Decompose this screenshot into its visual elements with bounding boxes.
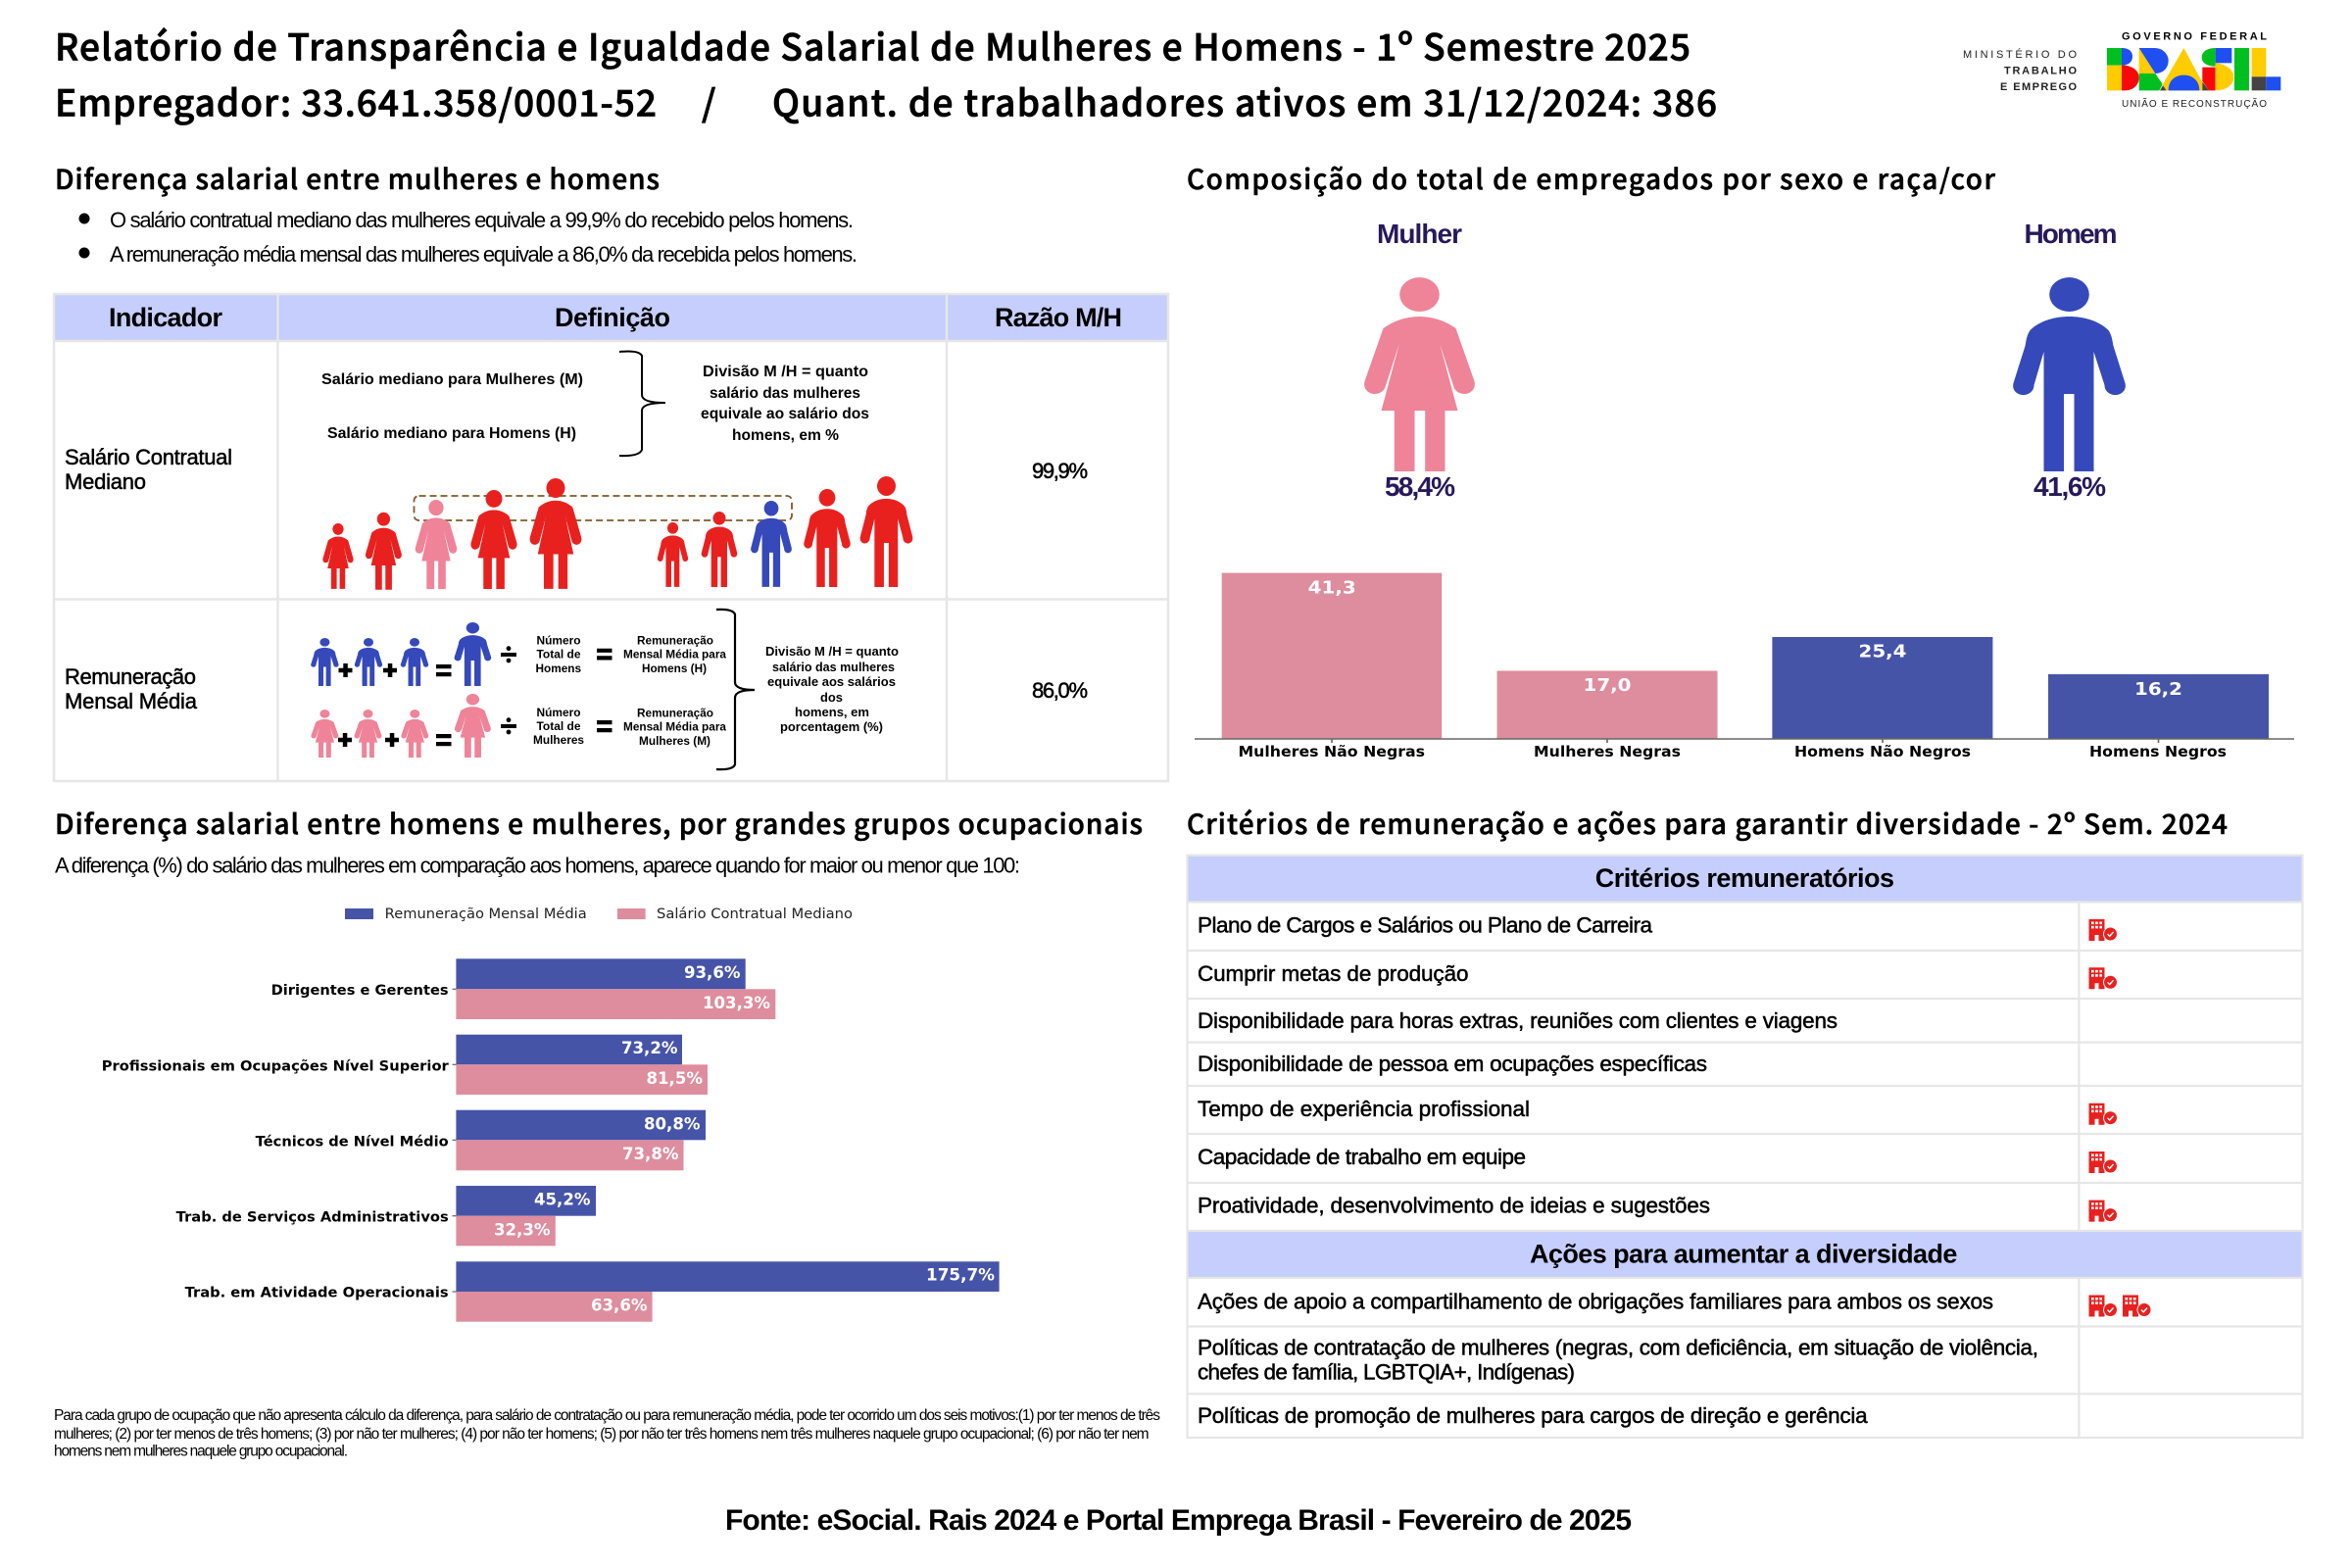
brace and formula explanation: Divisão M /H = quanto: [765, 644, 899, 659]
title line 2: /: [702, 74, 715, 127]
row: metas de produção: [1198, 961, 2118, 990]
formula: mulheres: Mensal Média para: [623, 722, 727, 734]
woman figure: 58,4%: [1385, 471, 1455, 502]
man figure: Homem: [2025, 219, 2117, 249]
value: 86,0%: 86,0%: [1032, 678, 1088, 703]
formula: homens: Homens: [535, 663, 581, 675]
row: políticas de contratação: Políticas de contratação de mulheres (negras, com deficiência, em situação de violência,: [1198, 1336, 2038, 1360]
subtitle: A diferença (%) do salário das mulheres em comparação aos homens, aparece quando for maior ou menor que 100:: [55, 854, 1020, 878]
table header: Razão M/H: [995, 303, 1122, 332]
footnote: mulheres; (2) por ter menos de três homens; (3) por não ter mulheres; (4) por não ter homens; (5) por não ter três homens nem três mulheres naquele grupo ocupacional; (6) por não ter nem: [54, 1426, 1150, 1443]
legend: Salário Contratual Mediano: [657, 906, 853, 922]
group: serviços administrativos: Trab. de Serviços Administrativos: [176, 1210, 449, 1226]
row: experiência: Tempo de experiência profissional: [1198, 1097, 1530, 1121]
heading: Diferença salarial entre homens e mulheres, por grandes grupos ocupacionais: [55, 804, 1143, 843]
source note: Fonte: eSocial. Rais 2024 e Portal Emprega Brasil - Fevereiro de 2025: [725, 1504, 1632, 1537]
row: metas de produção: Cumprir metas de produção: [1198, 961, 1468, 986]
group: atividade operacionais: 63,6%: [591, 1297, 647, 1316]
heading: Composição do total de empregados por sexo e raça/cor: [1187, 159, 1996, 198]
ministry name: [1963, 48, 2077, 93]
bullet 1: O salário contratual mediano das mulheres equivale a 99,9% do recebido pelos homens.: [110, 208, 854, 232]
formula: mulheres: Mulheres (M): [639, 736, 710, 748]
definition: salário mediano: Salário mediano para Mulheres (M): [321, 371, 583, 388]
ministry name: TRABALHO: [2004, 65, 2077, 76]
row: políticas de promoção: Políticas de promoção de mulheres para cargos de direção e gerência: [1198, 1403, 1868, 1428]
formula: homens: [311, 622, 727, 686]
group: técnicos de nível médio: Técnicos de Nível Médio: [256, 1134, 449, 1150]
bar: mulheres negras: 17,0: [1584, 675, 1631, 696]
formula: mulheres: [311, 694, 727, 758]
bar chart: raça/cor: [1195, 573, 2294, 760]
title line 2: Quant. de trabalhadores ativos em 31/12/2024: 386: [772, 74, 1717, 127]
header: ações: [1188, 1231, 2303, 1278]
footnote: [54, 1407, 1160, 1460]
man figure: [2013, 219, 2126, 502]
title line 2: Empregador: 33.641.358/0001-52: [55, 74, 657, 127]
formula: mulheres: Total de: [537, 721, 580, 733]
bar: homens negros: 16,2: [2134, 679, 2182, 700]
formula: homens: Homens (H): [642, 663, 707, 675]
row label: salário contratual mediano: Salário Contratual: [65, 445, 232, 469]
row: proatividade: [1198, 1194, 2118, 1222]
title line 1: Relatório de Transparência e Igualdade Salarial de Mulheres e Homens - 1º Semestre 2025: [55, 18, 1690, 71]
brace and formula explanation: homens, em: [795, 705, 869, 719]
row: horas extras: Disponibilidade para horas extras, reuniões com clientes e viagens: [1198, 1008, 1838, 1033]
group: profissionais nível superior: [102, 1035, 708, 1095]
group: dirigentes e gerentes: 93,6%: [684, 963, 741, 983]
logo: ministério and governo federal: [1963, 31, 2280, 110]
group: profissionais nível superior: 73,2%: [621, 1039, 678, 1058]
group: técnicos de nível médio: [256, 1110, 706, 1170]
pictogram: median line of women and men: [322, 476, 912, 590]
brasil logo shapes: [2107, 48, 2280, 90]
definition: salário mediano: homens, em %: [732, 427, 839, 444]
row label: salário contratual mediano: Mediano: [65, 469, 146, 494]
horizontal bar chart: [102, 958, 1000, 1322]
header: ações: Ações para aumentar a diversidade: [1530, 1239, 1957, 1268]
row: ocupações específicas: Disponibilidade de pessoa em ocupações específicas: [1198, 1052, 1707, 1076]
axis labels: Homens Não Negros: [1794, 743, 1971, 760]
bar: homens não negros: [1772, 637, 1992, 739]
man figure: 41,6%: [2034, 471, 2106, 502]
table: critérios: [1188, 856, 2303, 1438]
row: políticas de contratação: [1198, 1336, 2038, 1385]
axis labels: Mulheres Não Negras: [1239, 743, 1425, 760]
axis labels: [1239, 743, 2227, 760]
axis labels: Mulheres Negras: [1534, 743, 1681, 760]
footnote: Para cada grupo de ocupação que não apresenta cálculo da diferença, para salário de contratação ou para remuneração média, pode ter ocorrido um dos seis motivos:(1) por ter menos de três: [54, 1407, 1160, 1424]
row: plano de cargos: Plano de Cargos e Salários ou Plano de Carreira: [1198, 913, 1652, 938]
formula: mulheres: Mulheres: [533, 735, 584, 747]
formula: homens: Remuneração: [637, 636, 713, 648]
legend: Remuneração Mensal Média: [385, 906, 587, 922]
header: critérios remuneratórios: [1188, 856, 2303, 902]
group: atividade operacionais: 175,7%: [926, 1266, 995, 1286]
header: critérios remuneratórios: Critérios remuneratórios: [1595, 863, 1894, 893]
group: dirigentes e gerentes: [271, 958, 775, 1019]
row: experiência: [1198, 1097, 2118, 1125]
woman figure: Mulher: [1377, 219, 1462, 249]
row label: remuneração mensal média: Mensal Média: [65, 689, 198, 713]
value: 99,9%: 99,9%: [1032, 459, 1088, 483]
row label: remuneração mensal média: [65, 664, 198, 713]
group: dirigentes e gerentes: Dirigentes e Gerentes: [271, 983, 449, 999]
group: serviços administrativos: 32,3%: [494, 1221, 551, 1241]
bar: mulheres não negras: 41,3: [1308, 578, 1356, 599]
table header: Definição: [555, 303, 670, 332]
row label: remuneração mensal média: Remuneração: [65, 664, 196, 689]
formula: mulheres: Número: [537, 708, 580, 719]
row: trabalho em equipe: Capacidade de trabalho em equipe: [1198, 1145, 1526, 1169]
definition: salário mediano: [321, 351, 869, 456]
formula: homens: Mensal Média para: [623, 650, 727, 662]
panel: composição por sexo e raça/cor: [1187, 159, 2294, 760]
table header: [54, 294, 1168, 341]
heading: Diferença salarial entre mulheres e homens: [55, 159, 660, 198]
ministry name: MINISTÉRIO DO: [1963, 48, 2077, 61]
bullet 2: A remuneração média mensal das mulheres equivale a 86,0% da recebida pelos homens.: [110, 242, 858, 267]
definition: salário mediano: Divisão M /H = quanto: [703, 364, 868, 380]
title: [55, 18, 1717, 127]
row: obrigações familiares: Ações de apoio a compartilhamento de obrigações familiares para ambos os sexos: [1198, 1290, 1993, 1314]
group: serviços administrativos: [176, 1186, 596, 1246]
group: atividade operacionais: [185, 1261, 1000, 1322]
woman figure: [1364, 219, 1475, 502]
formula: homens: Número: [537, 636, 580, 648]
bar: mulheres negras: [1497, 670, 1717, 739]
panel: diferença salarial: [54, 159, 1168, 781]
row: políticas de contratação: chefes de família, LGBTQIA+, Indígenas): [1198, 1360, 1575, 1385]
group: técnicos de nível médio: 80,8%: [644, 1115, 700, 1135]
brace and formula explanation: dos: [820, 690, 843, 705]
row: proatividade: Proatividade, desenvolvimento de ideias e sugestões: [1198, 1194, 1710, 1218]
group: dirigentes e gerentes: 103,3%: [703, 994, 770, 1013]
definition: salário mediano: salário das mulheres: [710, 385, 860, 402]
brace and formula explanation: salário das mulheres: [772, 660, 895, 674]
panel: grupos ocupacionais: [54, 804, 1160, 1460]
axis labels: Homens Negros: [2089, 743, 2227, 760]
brace and formula explanation: porcentagem (%): [780, 719, 883, 734]
row: plano de cargos: [1198, 913, 2118, 941]
formula: mulheres: Remuneração: [637, 709, 713, 720]
bar: homens não negros: 25,4: [1858, 642, 1907, 662]
title line 2: [55, 74, 1717, 127]
legend: [345, 906, 853, 922]
definition: salário mediano: Salário mediano para Homens (H): [327, 425, 576, 442]
governo federal label: GOVERNO FEDERAL: [2122, 31, 2267, 43]
group: técnicos de nível médio: 73,8%: [622, 1145, 678, 1164]
bar: mulheres não negras: [1222, 573, 1442, 739]
table: indicadores: [54, 294, 1168, 781]
bar: homens negros: [2048, 674, 2269, 739]
brace and formula explanation: [716, 610, 899, 769]
group: serviços administrativos: 45,2%: [534, 1191, 590, 1210]
group: profissionais nível superior: 81,5%: [647, 1069, 703, 1089]
definition: salário mediano: equivale ao salário dos: [701, 406, 869, 422]
formula: homens: Total de: [537, 650, 580, 662]
table header: Indicador: [109, 303, 222, 332]
panel: critérios e ações: [1187, 804, 2303, 1438]
footnote: homens nem mulheres naquele grupo ocupacional.: [54, 1444, 348, 1460]
ministry name: E EMPREGO: [2000, 81, 2077, 93]
group: profissionais nível superior: Profissionais em Ocupações Nível Superior: [102, 1058, 450, 1074]
união e reconstrução label: UNIÃO E RECONSTRUÇÃO: [2122, 97, 2267, 110]
heading: Critérios de remuneração e ações para garantir diversidade - 2º Sem. 2024: [1187, 804, 2228, 843]
brace and formula explanation: equivale aos salários: [767, 674, 896, 689]
row: trabalho em equipe: [1198, 1145, 2118, 1174]
group: atividade operacionais: Trab. em Atividade Operacionais: [185, 1286, 449, 1301]
row label: salário contratual mediano: [65, 445, 232, 494]
